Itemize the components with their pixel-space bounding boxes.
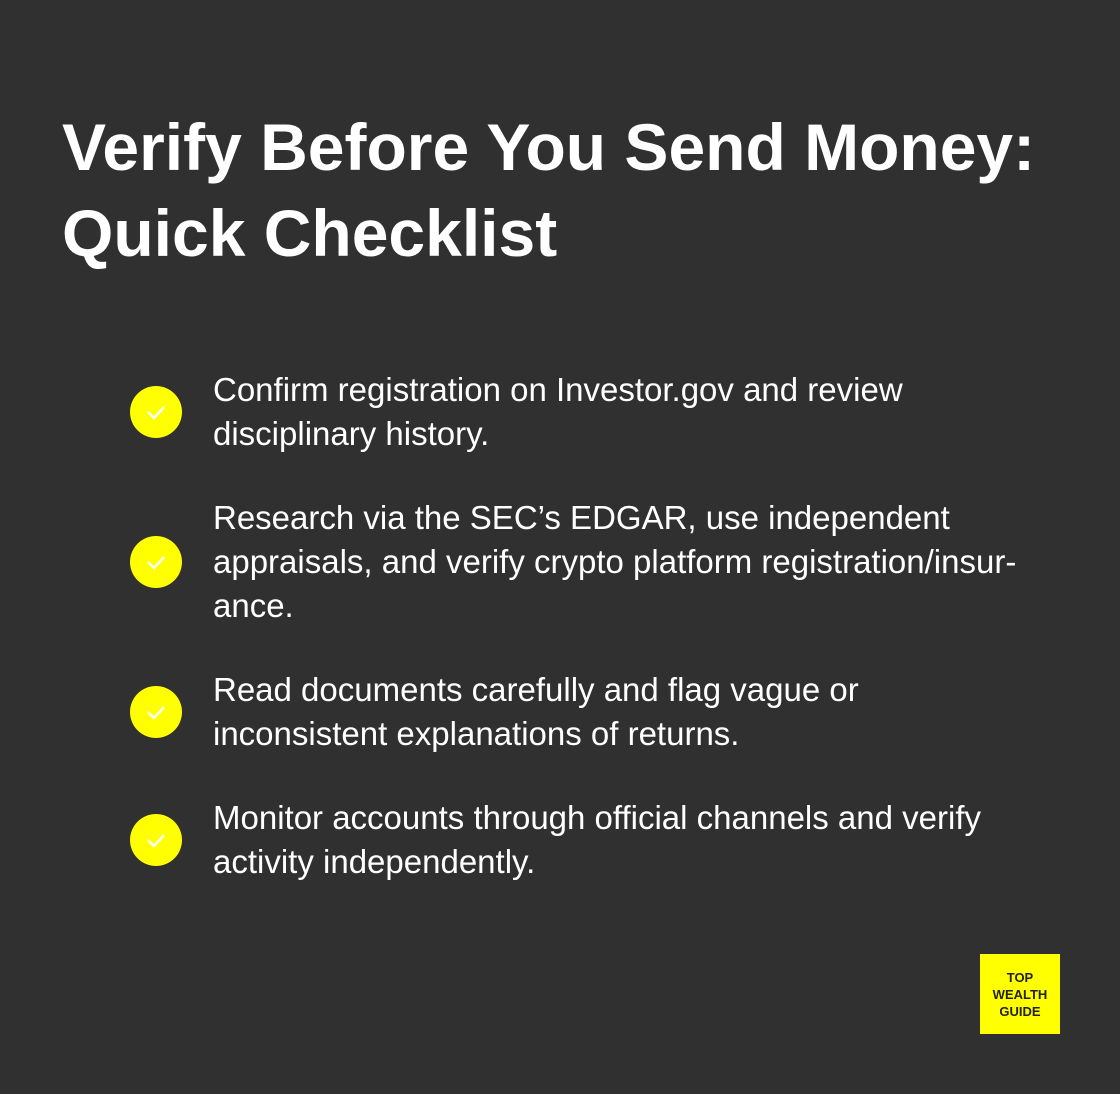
title: Quick Checklist xyxy=(62,196,557,270)
checklist item 3 xyxy=(130,671,859,752)
text 2: appraisals, and verify crypto platform registration/insur- xyxy=(213,543,1016,580)
text 3: inconsistent explanations of returns. xyxy=(213,715,739,752)
icon: check 3 xyxy=(130,686,182,738)
logo: GUIDE xyxy=(999,1004,1041,1018)
title: Verify Before You Send Money: xyxy=(62,110,1035,184)
text 3: Read documents carefully and flag vague or xyxy=(213,671,859,708)
text 4 xyxy=(213,799,981,880)
text 2: Research via the SEC’s EDGAR, use independent xyxy=(213,499,950,536)
text 3 xyxy=(213,671,859,752)
logo: WEALTH xyxy=(993,986,1047,1002)
title xyxy=(62,110,1035,270)
text 1: Confirm registration on Investor.gov and review xyxy=(213,371,903,408)
icon: check 2 xyxy=(130,536,182,588)
text 1 xyxy=(213,371,903,452)
text 2 xyxy=(213,499,1016,624)
logo xyxy=(980,954,1060,1034)
icon: check 1 xyxy=(130,386,182,438)
icon: check 4 xyxy=(130,814,182,866)
checklist item 4 xyxy=(130,799,981,880)
text 1: disciplinary history. xyxy=(213,415,489,452)
text 4: Monitor accounts through official channels and verify xyxy=(213,799,981,836)
checklist item 1 xyxy=(130,371,903,452)
text 2: ance. xyxy=(213,587,294,624)
logo: TOP xyxy=(1007,970,1033,984)
checklist item 2 xyxy=(130,499,1016,624)
text 4: activity independently. xyxy=(213,843,535,880)
